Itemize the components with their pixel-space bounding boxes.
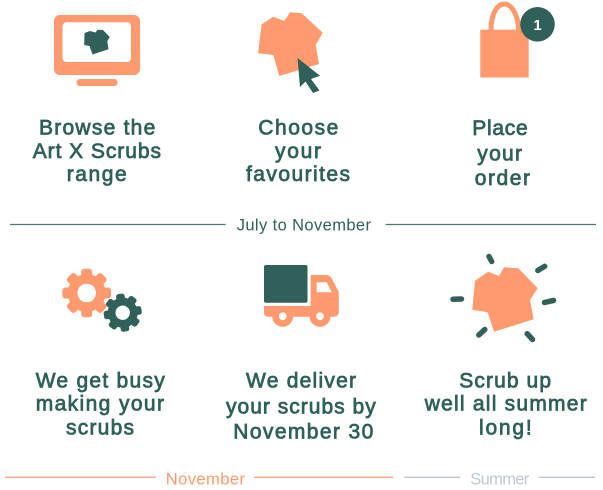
- heading: place your order: Place: [472, 117, 528, 140]
- icon: shopping bag with badge: 1: [533, 17, 542, 34]
- heading: browse the range: [33, 117, 161, 186]
- heading: place your order: [472, 117, 530, 190]
- heading: we deliver: November 30: [233, 420, 373, 443]
- heading: choose your favourites: your: [275, 140, 321, 163]
- heading: scrub up: [424, 370, 587, 439]
- heading: choose your favourites: favourites: [246, 163, 350, 186]
- heading: we get busy: [36, 370, 165, 439]
- heading: place your order: your: [477, 143, 522, 166]
- timeline: November: November: [166, 470, 246, 488]
- heading: browse the range: Browse the: [39, 117, 155, 140]
- heading: we deliver: We deliver: [246, 370, 356, 393]
- timeline: July to November: July to November: [237, 217, 372, 235]
- heading: choose your favourites: Choose: [258, 117, 338, 140]
- heading: we get busy: scrubs: [66, 416, 134, 439]
- icon: shopping bag with badge: [480, 4, 555, 78]
- timeline: Summer: Summer: [470, 470, 530, 488]
- heading: browse the range: Art X Scrubs: [33, 140, 161, 163]
- icon: delivery truck: [264, 265, 339, 327]
- icon: monitor with shirt: [54, 15, 140, 86]
- heading: scrub up: well all summer: [424, 393, 587, 416]
- heading: we deliver: [226, 370, 376, 443]
- heading: browse the range: range: [67, 163, 127, 186]
- heading: scrub up: Scrub up: [459, 370, 551, 393]
- heading: choose your favourites: [246, 117, 350, 186]
- icon: gears: [62, 269, 144, 334]
- heading: we deliver: your scrubs by: [226, 395, 376, 418]
- heading: we get busy: We get busy: [36, 370, 165, 393]
- icon: shirt with sparkle dashes: [453, 256, 554, 340]
- heading: scrub up: long!: [479, 416, 532, 439]
- icon: shirt with cursor: [258, 12, 323, 93]
- heading: place your order: order: [475, 167, 530, 190]
- heading: we get busy: making your: [36, 393, 164, 416]
